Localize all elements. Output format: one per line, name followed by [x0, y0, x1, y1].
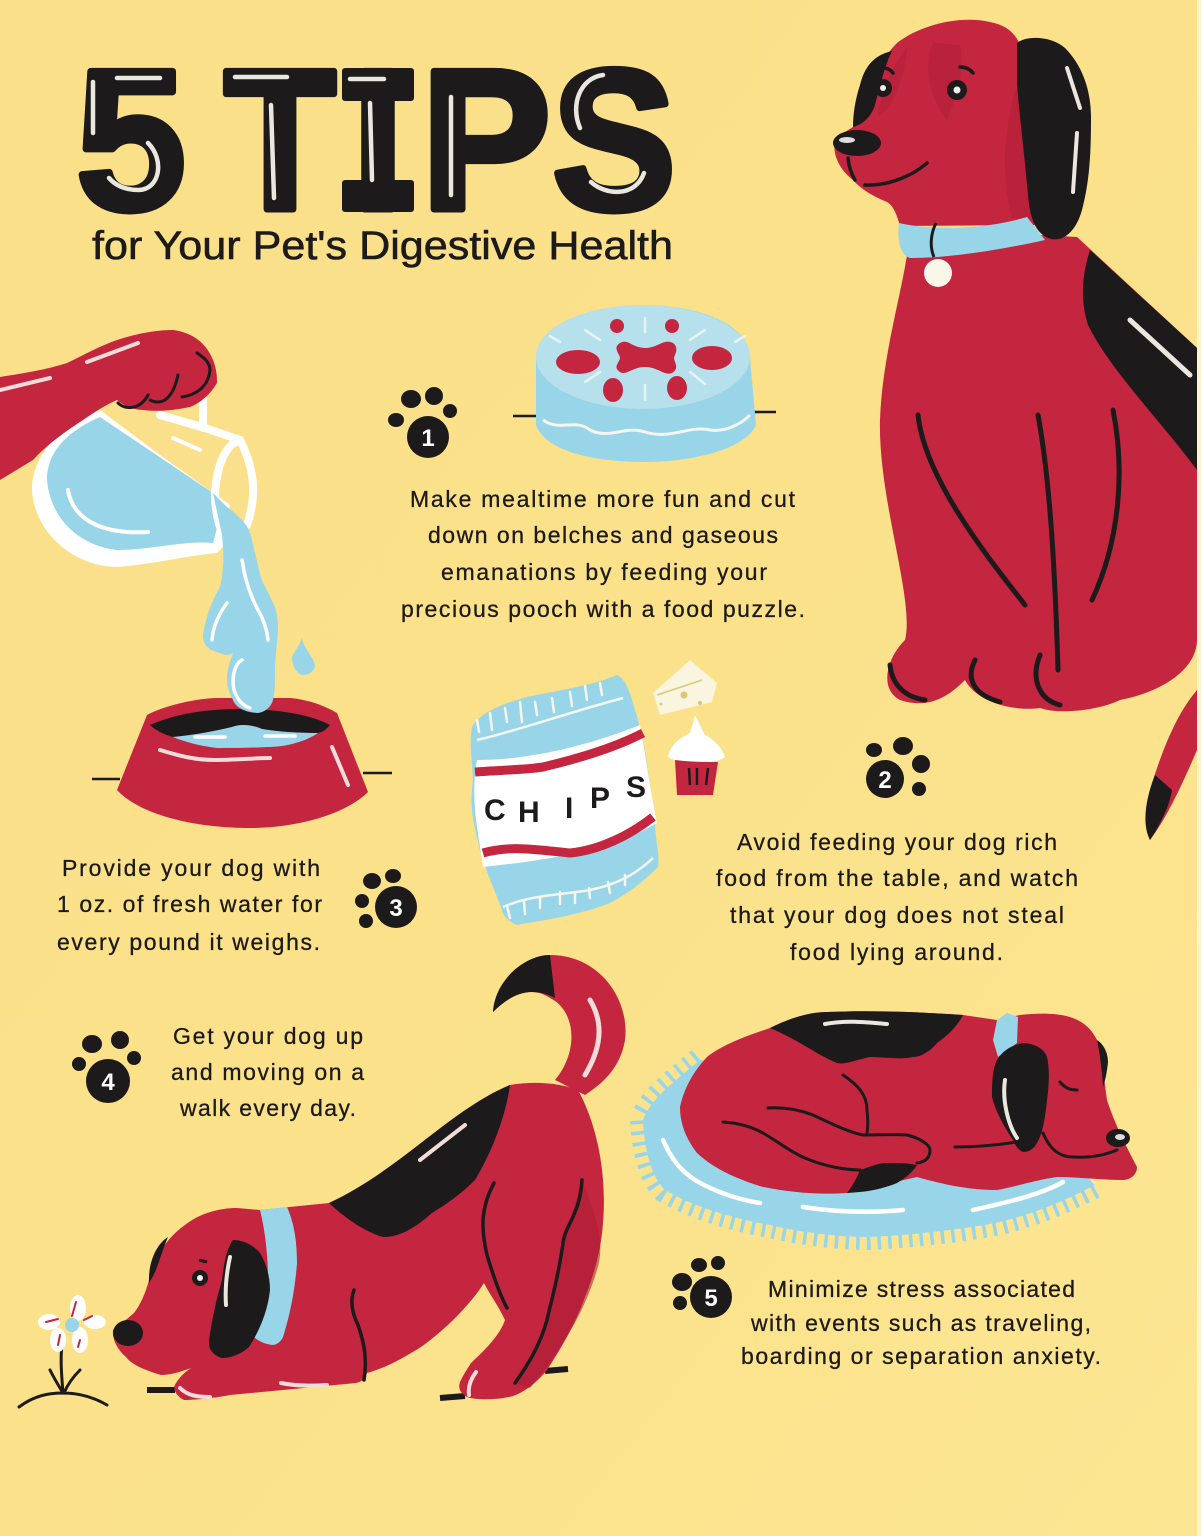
tip 5 text: with events such as traveling,: [750, 1310, 1091, 1336]
tip 1 text: Make mealtime more fun and cut: [410, 486, 796, 512]
water jug: [32, 400, 315, 713]
collar: [898, 217, 1045, 258]
paw 1: [388, 387, 457, 458]
tip 2 text: food lying around.: [790, 939, 1003, 965]
paw 1: 1: [421, 425, 435, 452]
paw 4: [72, 1031, 141, 1103]
play bow dog: [113, 955, 626, 1400]
paw 5: 5: [704, 1285, 718, 1312]
paw 2: [866, 737, 930, 798]
tip 1 text: emanations by feeding your: [441, 559, 767, 585]
chips bag: CHIPS: [484, 771, 646, 829]
dog body: [880, 235, 1197, 711]
back patch: [1083, 250, 1197, 470]
tip 3 text: [57, 855, 322, 955]
title: [76, 29, 676, 252]
subtitle: for Your Pet's Digestive Health: [92, 224, 673, 268]
face: [113, 1237, 208, 1346]
black paw: [847, 1163, 917, 1193]
collar: [993, 1013, 1018, 1057]
face: [833, 67, 973, 185]
ear: [209, 1240, 270, 1358]
collar: [254, 1207, 297, 1345]
face: [955, 1040, 1130, 1157]
paw 3: 3: [389, 895, 403, 922]
tip 3 text: every pound it weighs.: [57, 929, 320, 955]
tip 1 text: precious pooch with a food puzzle.: [401, 596, 805, 622]
tip 5 text: boarding or separation anxiety.: [741, 1343, 1101, 1369]
tip 2 text: food from the table, and watch: [716, 865, 1078, 891]
cheese: [653, 660, 717, 715]
tip 1 text: [401, 486, 805, 622]
tip 3 text: Provide your dog with: [62, 855, 320, 881]
paw 2: 2: [878, 767, 892, 794]
leg lines: [723, 1075, 930, 1170]
tip 5 text: Minimize stress associated: [768, 1276, 1075, 1302]
food puzzle: [513, 305, 776, 462]
tail: [493, 955, 626, 1095]
tip 2 text: Avoid feeding your dog rich: [737, 829, 1057, 855]
tip 4 text: and moving on a: [171, 1059, 364, 1085]
sleeping dog: [680, 1011, 1137, 1194]
title: T: [224, 29, 336, 252]
paw 4: 4: [101, 1069, 115, 1096]
tip 2 text: [716, 829, 1078, 965]
title: 5: [76, 29, 186, 252]
title: I: [352, 29, 404, 252]
title: P: [421, 29, 551, 252]
ear: [992, 1043, 1049, 1152]
tip 5 text: [741, 1276, 1101, 1369]
body: [113, 1083, 604, 1400]
sitting dog: [833, 20, 1197, 840]
lines: [352, 1180, 582, 1383]
tip 4 text: walk every day.: [179, 1095, 356, 1121]
body lines: [890, 320, 1190, 705]
tip 4 text: [171, 1023, 364, 1121]
body: [680, 1011, 1137, 1194]
tail: [1145, 690, 1197, 840]
paw pouring jug: [0, 330, 315, 713]
ear highlights: [1067, 68, 1080, 192]
tag: [924, 259, 952, 287]
flower: [19, 1295, 107, 1407]
ground marks: [147, 1369, 568, 1398]
rug: [643, 1060, 1095, 1237]
water bowl: [92, 698, 392, 828]
paw 3: [355, 869, 417, 928]
tip 3 text: 1 oz. of fresh water for: [57, 891, 322, 917]
title: S: [552, 29, 676, 252]
tip 2 text: that your dog does not steal: [730, 902, 1064, 928]
tip 1 text: down on belches and gaseous: [428, 522, 778, 548]
ears: [853, 38, 1091, 239]
head: [834, 20, 1040, 226]
head shading: [878, 43, 1040, 220]
cupcake: [668, 715, 725, 795]
back patch: [770, 1011, 963, 1063]
hind leg shading: [515, 1180, 600, 1388]
arm: [0, 330, 217, 480]
back patch: [329, 1085, 510, 1237]
chips bag: [471, 675, 658, 925]
paw 5: [672, 1256, 732, 1318]
tip 4 text: Get your dog up: [173, 1023, 363, 1049]
